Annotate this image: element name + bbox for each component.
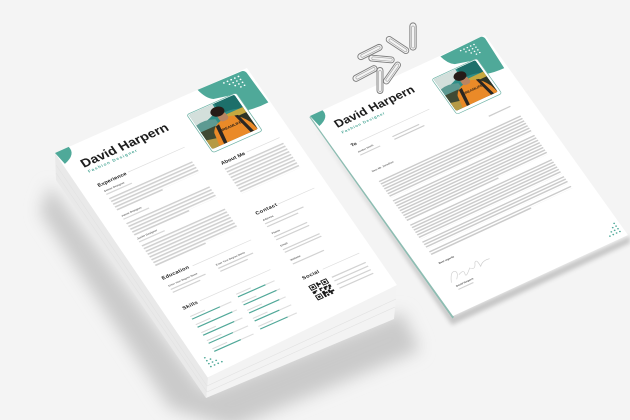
experience heading: Experience (97, 171, 128, 189)
paper stack edges (55, 153, 397, 398)
education: Education (161, 265, 191, 281)
teal header shape (440, 36, 506, 87)
social: Social (301, 269, 321, 281)
corner shape: top left (310, 110, 330, 127)
date (488, 106, 511, 117)
name heading: David Harpern (77, 121, 171, 170)
contact: Address (262, 214, 275, 222)
contact (254, 194, 332, 265)
stack shadow (40, 185, 420, 420)
portrait photo: DREAMLIFE (219, 120, 243, 133)
dots: header (223, 75, 246, 93)
resume page (53, 68, 401, 377)
portrait photo: DREAMLIFE (462, 83, 484, 96)
teal header shape (198, 69, 268, 124)
recipient block: Jordan Smith (357, 144, 375, 153)
job title: Fashion Designer (340, 111, 386, 134)
education: Enter Your Degree Name (215, 250, 246, 267)
skill bars: left column (190, 299, 254, 352)
dots: bottom corner (204, 352, 223, 368)
contact: Contact (254, 202, 279, 217)
education: Enter Your Degree Name (167, 271, 199, 288)
contact: Phone (271, 228, 281, 235)
corner shape: top left (55, 147, 77, 165)
about me (220, 136, 300, 194)
name heading: David Harpern (331, 83, 417, 130)
signature (446, 256, 493, 283)
experience entries: Junior Designer (120, 205, 143, 218)
experience entries (103, 153, 239, 266)
experience entries: Senior Designer (103, 180, 126, 193)
letter sheet shadow (312, 122, 630, 325)
paper clips (352, 23, 416, 94)
signer name: David Harpern (455, 277, 475, 288)
resume sheet (53, 68, 401, 377)
about me: About Me (220, 151, 247, 166)
recipient block: To (350, 141, 358, 148)
salutation: Dear Mr. Jonathan (371, 160, 395, 173)
dots: bottom corner (603, 222, 621, 237)
letter sheet back edge (310, 116, 454, 318)
skill bars: right column (236, 278, 297, 330)
skills (182, 269, 298, 352)
dots: header (459, 44, 481, 60)
recipient block (350, 107, 437, 156)
job title: Fashion Designer (87, 148, 138, 174)
qr code (308, 278, 336, 300)
signer name (455, 277, 476, 290)
letter body (379, 115, 573, 255)
portrait photo (187, 93, 262, 153)
social (301, 251, 374, 299)
sign off: Best regards (438, 255, 455, 265)
education (161, 240, 255, 293)
portrait photo (432, 58, 502, 114)
skills: Skills (182, 300, 199, 311)
experience entries: Junior Designer (136, 228, 159, 240)
cover letter sheet (310, 35, 628, 316)
letter page (310, 35, 628, 316)
contact: Email (279, 241, 289, 247)
contact: Website (289, 254, 302, 262)
